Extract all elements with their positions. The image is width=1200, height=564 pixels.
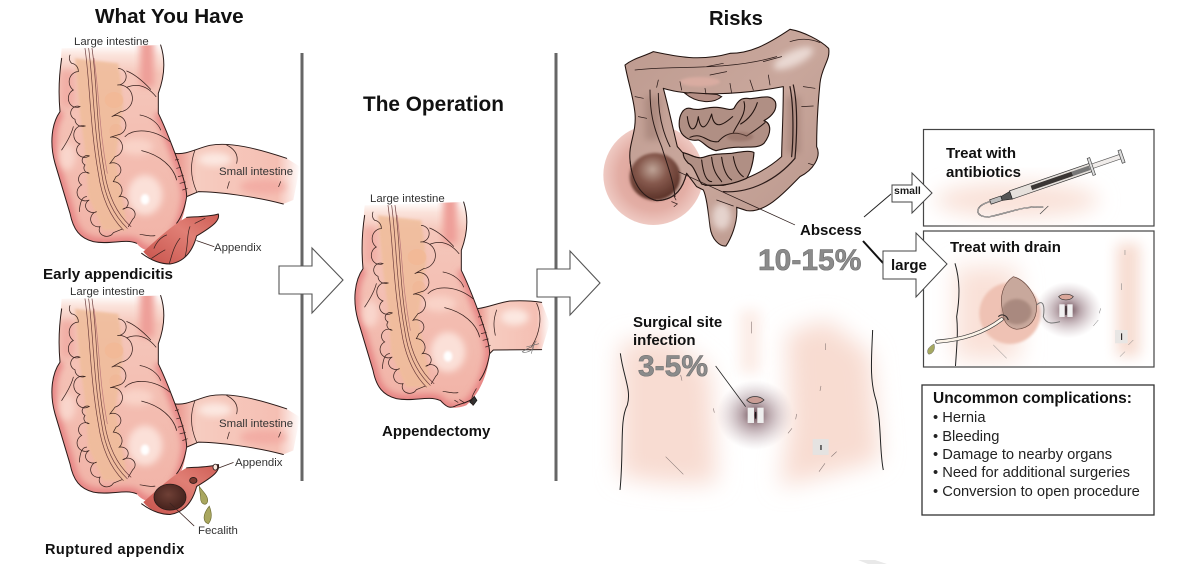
label: small intestine, ruptured: Small intestine xyxy=(219,418,293,430)
list: complications: • Hernia xyxy=(933,410,986,426)
port site dressing xyxy=(813,439,829,455)
connector: abscess to small xyxy=(864,194,891,217)
arrow: small xyxy=(892,173,932,213)
heading: treat with antibiotics: antibiotics xyxy=(946,164,1021,181)
umbilicus xyxy=(747,396,764,403)
illustration: ruptured appendix xyxy=(52,280,300,526)
caption: appendectomy: Appendectomy xyxy=(382,423,491,440)
caption: early appendicitis: Early appendicitis xyxy=(43,266,173,283)
port site dressing xyxy=(748,408,764,423)
heading: What You Have: What You Have xyxy=(95,5,244,28)
icon: drops of pus xyxy=(199,486,211,524)
arrow: large xyxy=(883,233,947,297)
icon: appendix stump clip xyxy=(470,389,477,405)
list: complications: • Bleeding xyxy=(933,429,999,445)
arrow: large: large xyxy=(891,257,927,274)
stat: infection rate: 3-5% xyxy=(638,350,708,383)
panel: treat with antibiotics xyxy=(924,130,1154,226)
divider xyxy=(300,53,304,481)
illustration: appendectomy xyxy=(355,187,550,408)
list: complications: • Conversion to open procedure xyxy=(933,484,1140,500)
heading: treat with drain: Treat with drain xyxy=(950,239,1061,256)
heading: The Operation: The Operation xyxy=(363,93,504,116)
skin tone xyxy=(935,182,1099,218)
arrow: small: small xyxy=(894,185,921,197)
icon: syringe xyxy=(978,147,1126,217)
abscess halo xyxy=(603,125,703,225)
label: large intestine, operation: Large intestine xyxy=(370,193,445,205)
divider xyxy=(554,53,558,481)
panel: uncommon complications: Uncommon complications: xyxy=(933,390,1132,407)
label: fecalith: Fecalith xyxy=(198,525,238,537)
arrow: to the operation xyxy=(279,248,343,313)
label: large intestine, ruptured: Large intestine xyxy=(70,286,145,298)
icon: drained pus xyxy=(928,344,934,354)
list: complications: • Damage to nearby organs xyxy=(933,447,1112,463)
panel: treat with drain xyxy=(924,231,1154,373)
label: abscess: Abscess xyxy=(800,222,862,239)
stat: abscess rate: 10-15% xyxy=(758,244,861,277)
skin tone xyxy=(955,267,1020,360)
label: small intestine, early: Small intestine xyxy=(219,166,293,178)
arrow: to risks xyxy=(537,251,600,315)
list: complications xyxy=(933,410,1140,500)
heading: surgical site infection: infection xyxy=(633,332,696,349)
illustration: early appendicitis xyxy=(52,30,300,264)
label: large intestine, early: Large intestine xyxy=(74,36,149,48)
list: complications: • Need for additional surgeries xyxy=(933,465,1130,481)
label: appendix, ruptured: Appendix xyxy=(235,457,283,469)
signature xyxy=(522,341,539,354)
connector: abscess to large xyxy=(863,241,883,263)
small bowel loops xyxy=(679,97,776,185)
panel: uncommon complications xyxy=(922,385,1154,515)
heading: surgical site infection: Surgical site xyxy=(633,314,722,331)
label: appendix, early: Appendix xyxy=(214,242,262,254)
heading: treat with antibiotics: Treat with xyxy=(946,145,1016,162)
illustration: colon with abscess xyxy=(603,29,829,246)
illustration: abdomen with surgical site infection xyxy=(620,310,883,490)
caption: ruptured appendix: Ruptured appendix xyxy=(45,542,185,558)
watermark fragment xyxy=(858,560,887,564)
heading: Risks: Risks xyxy=(709,8,763,30)
shading on colon xyxy=(645,43,816,230)
